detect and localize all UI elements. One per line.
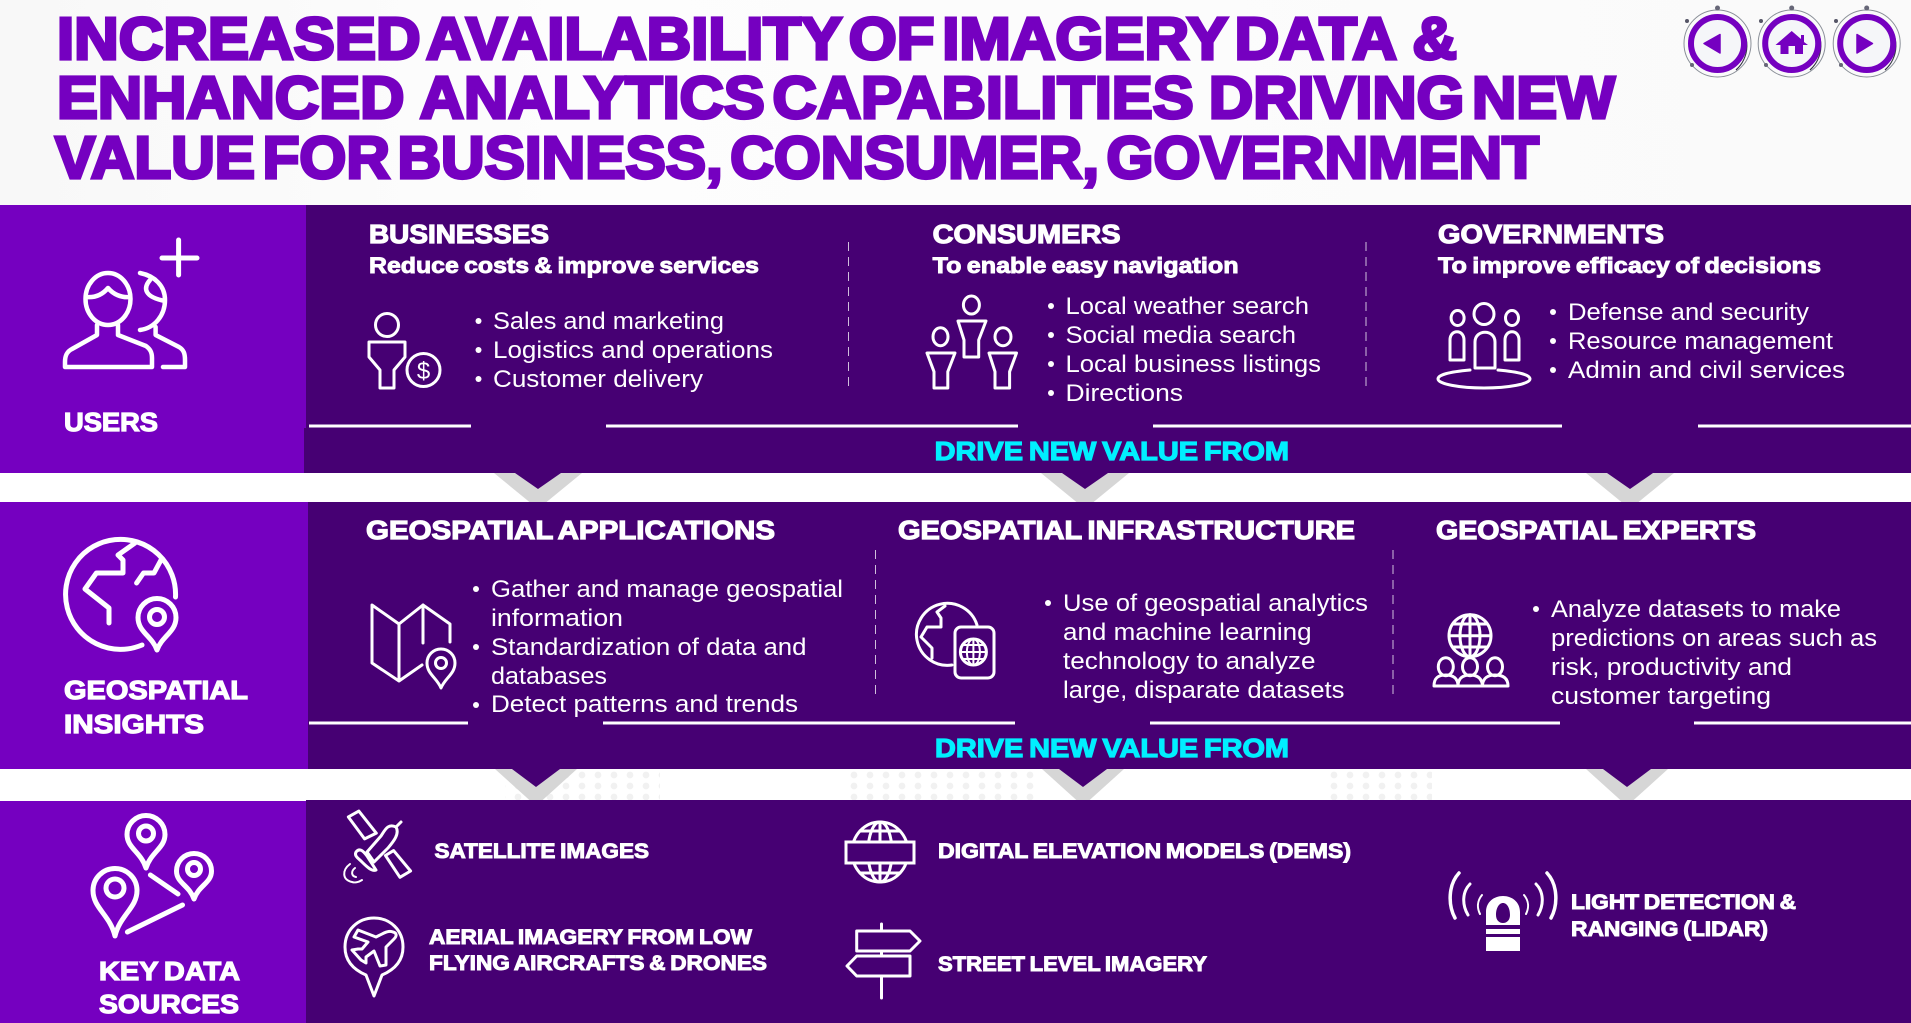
- list: applications: information: [491, 605, 623, 632]
- segment: geospatial applications: [366, 515, 843, 718]
- source: satellite images: [344, 809, 649, 882]
- icon: users: [65, 240, 197, 367]
- icon: forward button: [1833, 6, 1900, 77]
- label: geospatial insights: INSIGHTS: [64, 709, 204, 739]
- source: aerial imagery: FLYING AIRCRAFTS & DRONES: [429, 951, 767, 975]
- list: business uses: Sales and marketing: [493, 308, 724, 335]
- arrows from insights to data sources: [495, 769, 1668, 806]
- icon: globe with pin: [66, 539, 176, 650]
- icon: signpost: [847, 924, 920, 998]
- source: digital elevation models: DIGITAL ELEVATION MODELS (DEMS): [938, 839, 1351, 863]
- segment: governments: To improve efficacy of decisions: [1438, 253, 1821, 278]
- banner: drive new value from: DRIVE NEW VALUE FROM: [935, 733, 1289, 763]
- label: key data sources: KEY DATA: [99, 956, 240, 986]
- segment: geospatial infrastructure: [898, 515, 1368, 704]
- label: users: USERS: [64, 407, 158, 437]
- source: lidar: RANGING (LIDAR): [1571, 917, 1768, 941]
- icon: home button: [1758, 6, 1825, 77]
- list: business uses: Logistics and operations: [493, 337, 773, 364]
- list: experts: Analyze datasets to make: [1551, 596, 1841, 623]
- icon: map with pin: [372, 605, 455, 688]
- segment: governments: GOVERNMENTS: [1438, 219, 1664, 249]
- list: consumer uses: [1048, 293, 1321, 407]
- panel: geospatial insights: [0, 502, 1911, 769]
- title: VALUE FOR BUSINESS, CONSUMER, GOVERNMENT: [55, 125, 1539, 191]
- title: [55, 6, 1615, 191]
- icon: consumers: [927, 296, 1016, 388]
- title: ENHANCED ANALYTICS CAPABILITIES DRIVING NEW: [57, 65, 1615, 131]
- arrows from users to insights: [494, 473, 1674, 509]
- list: applications: Gather and manage geospatial: [491, 576, 843, 603]
- source: satellite images: SATELLITE IMAGES: [434, 839, 649, 863]
- segment: governments: [1438, 219, 1845, 388]
- list: consumer uses: Directions: [1066, 380, 1183, 407]
- list: experts: customer targeting: [1551, 683, 1771, 710]
- list: infrastructure: and machine learning: [1063, 619, 1312, 646]
- source: street level imagery: STREET LEVEL IMAGERY: [938, 952, 1207, 976]
- source: aerial imagery: [345, 918, 767, 996]
- icon: globe with band: [846, 822, 914, 882]
- list: experts: [1533, 596, 1877, 710]
- list: government uses: Defense and security: [1568, 299, 1810, 326]
- segment: businesses: BUSINESSES: [369, 219, 549, 249]
- icon: globe and passport: [916, 603, 994, 678]
- list: infrastructure: technology to analyze: [1063, 648, 1316, 675]
- label: key data sources: SOURCES: [99, 989, 239, 1019]
- list: applications: Standardization of data and: [491, 634, 806, 661]
- list: experts: predictions on areas such as: [1551, 625, 1877, 652]
- list: applications: Detect patterns and trends: [491, 691, 798, 718]
- segment: geospatial experts: GEOSPATIAL EXPERTS: [1436, 515, 1756, 545]
- panel: users: [0, 205, 1911, 473]
- label: key data sources: [99, 956, 240, 1019]
- title: INCREASED AVAILABILITY OF IMAGERY DATA &: [57, 6, 1457, 72]
- banner: drive new value from: DRIVE NEW VALUE FROM: [935, 436, 1289, 466]
- segment: businesses: Reduce costs & improve services: [369, 253, 759, 278]
- list: government uses: Admin and civil services: [1568, 357, 1845, 384]
- list: consumer uses: Local weather search: [1066, 293, 1309, 320]
- list: applications: databases: [491, 663, 607, 690]
- list: infrastructure: Use of geospatial analytics: [1063, 590, 1368, 617]
- icon: satellite: [344, 809, 415, 882]
- list: consumer uses: Local business listings: [1066, 351, 1321, 378]
- icon: globe and people: [1434, 615, 1508, 686]
- segment: consumers: To enable easy navigation: [933, 253, 1239, 278]
- label: geospatial insights: [64, 675, 248, 739]
- list: experts: risk, productivity and: [1551, 654, 1792, 681]
- list: infrastructure: [1045, 590, 1368, 704]
- icon: businessperson with dollar: [369, 314, 440, 388]
- source: lidar: [1450, 873, 1796, 951]
- icon: plane in pin: [345, 918, 403, 996]
- label: geospatial insights: GEOSPATIAL: [64, 675, 248, 705]
- segment: geospatial infrastructure: GEOSPATIAL INFRASTRUCTURE: [898, 515, 1355, 545]
- icon: businessperson with dollar: $: [417, 358, 430, 385]
- list: business uses: [476, 308, 773, 393]
- segment: consumers: CONSUMERS: [933, 219, 1121, 249]
- segment: geospatial experts: [1434, 515, 1877, 710]
- segment: geospatial applications: GEOSPATIAL APPLICATIONS: [366, 515, 775, 545]
- source: aerial imagery: AERIAL IMAGERY FROM LOW: [429, 925, 753, 949]
- list: consumer uses: Social media search: [1066, 322, 1296, 349]
- icon: back button: [1684, 6, 1751, 77]
- icon: location pins: [93, 816, 212, 936]
- panel: key data sources: [0, 800, 1911, 1023]
- source: digital elevation models: [846, 822, 1351, 882]
- icon: government group: [1438, 304, 1530, 388]
- source: lidar: LIGHT DETECTION &: [1571, 890, 1796, 914]
- segment: businesses: [369, 219, 773, 393]
- segment: consumers: [927, 219, 1321, 407]
- list: infrastructure: large, disparate datasets: [1063, 677, 1344, 704]
- list: government uses: Resource management: [1568, 328, 1833, 355]
- icon: lidar sensor: [1450, 873, 1556, 951]
- list: applications: [473, 576, 843, 718]
- list: government uses: [1550, 299, 1845, 384]
- source: street level imagery: [847, 924, 1207, 998]
- list: business uses: Customer delivery: [493, 366, 704, 393]
- navigation buttons: [1684, 6, 1900, 77]
